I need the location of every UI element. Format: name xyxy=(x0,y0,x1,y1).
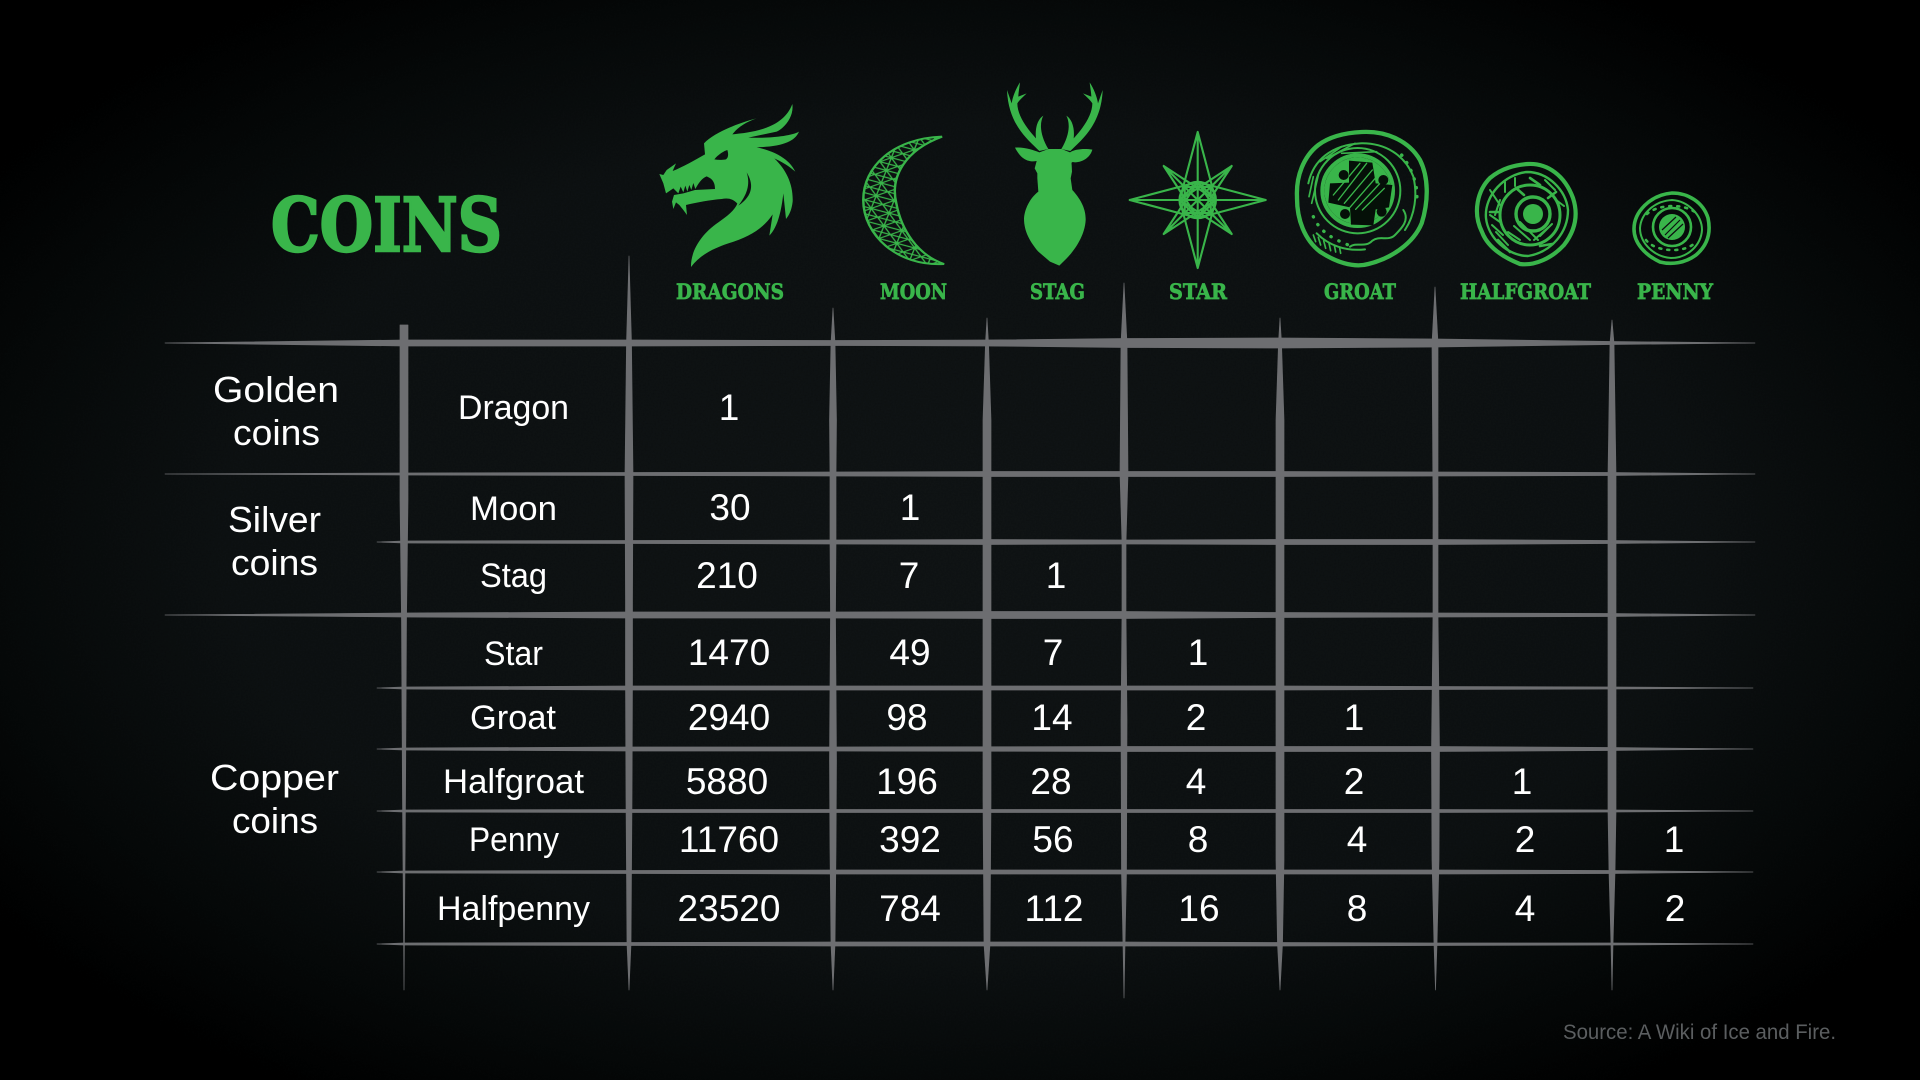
column: halfgroat values xyxy=(1512,761,1535,929)
column: dragons values: 2940 xyxy=(688,697,770,738)
column: dragons values: 1470 xyxy=(688,632,770,673)
icon: stag xyxy=(1007,82,1103,266)
column headers xyxy=(676,279,1714,304)
column: dragons values: 30 xyxy=(709,487,751,528)
column: groat values: 2 xyxy=(1344,761,1364,802)
column: dragons values: 5880 xyxy=(686,761,768,802)
group: silver coins: Silver xyxy=(228,499,321,540)
icon: star xyxy=(1130,132,1266,268)
header: star: STAR xyxy=(1169,279,1228,304)
column: star values xyxy=(1178,632,1220,929)
group: copper coins xyxy=(210,757,339,841)
column: star values: 2 xyxy=(1186,697,1206,738)
header: dragons: DRAGONS xyxy=(676,279,784,304)
column: star values: 16 xyxy=(1178,888,1220,929)
column: moon values: 7 xyxy=(899,555,919,596)
column: penny values: 2 xyxy=(1665,888,1685,929)
column: groat values xyxy=(1344,697,1367,929)
column: groat values: 4 xyxy=(1347,819,1367,860)
column: halfgroat values: 2 xyxy=(1515,819,1535,860)
group: copper coins: Copper xyxy=(210,757,339,798)
column: star values: 4 xyxy=(1186,761,1206,802)
header: penny: PENNY xyxy=(1637,279,1714,304)
group labels xyxy=(210,369,339,841)
row labels: Moon xyxy=(470,490,557,528)
row labels xyxy=(437,389,590,928)
column: moon values xyxy=(876,487,941,929)
row labels: Halfgroat xyxy=(443,763,585,801)
column: dragons values: 210 xyxy=(696,555,758,596)
table values xyxy=(678,387,1685,929)
column: stag values: 56 xyxy=(1032,819,1074,860)
icon: penny coin xyxy=(1634,193,1709,263)
column: moon values: 392 xyxy=(879,819,941,860)
column: dragons values: 1 xyxy=(719,387,739,428)
column: halfgroat values: 1 xyxy=(1512,761,1532,802)
column: moon values: 49 xyxy=(889,632,931,673)
title: COINS xyxy=(271,183,502,269)
group: silver coins xyxy=(228,499,321,583)
row labels: Star xyxy=(484,635,543,673)
column: penny values: 1 xyxy=(1664,819,1684,860)
column: stag values: 7 xyxy=(1043,632,1063,673)
column: groat values: 8 xyxy=(1347,888,1367,929)
column: halfgroat values: 4 xyxy=(1515,888,1535,929)
row labels: Groat xyxy=(470,699,557,737)
row labels: Penny xyxy=(469,821,559,859)
icon: dragon xyxy=(659,104,799,267)
column: stag values: 28 xyxy=(1030,761,1072,802)
icon: groat coin xyxy=(1297,132,1427,265)
row labels: Stag xyxy=(480,557,547,595)
column: stag values: 1 xyxy=(1046,555,1066,596)
column: dragons values: 23520 xyxy=(678,888,780,929)
column: star values: 8 xyxy=(1188,819,1208,860)
header: halfgroat: HALFGROAT xyxy=(1460,279,1591,304)
column: stag values xyxy=(1024,555,1084,929)
column: groat values: 1 xyxy=(1344,697,1364,738)
header: moon: MOON xyxy=(880,279,947,304)
column: moon values: 196 xyxy=(876,761,938,802)
header: groat: GROAT xyxy=(1324,279,1396,304)
column: moon values: 784 xyxy=(879,888,941,929)
column: moon values: 1 xyxy=(900,487,920,528)
group: golden coins: Golden xyxy=(213,369,339,410)
column: penny values xyxy=(1664,819,1685,929)
table grid lines xyxy=(165,256,1755,998)
source note: Source: A Wiki of Ice and Fire. xyxy=(1563,1021,1836,1044)
icon: moon xyxy=(860,133,946,267)
row labels: Dragon xyxy=(458,389,569,427)
column: stag values: 14 xyxy=(1031,697,1073,738)
icon: halfgroat coin xyxy=(1477,164,1576,264)
row labels: Halfpenny xyxy=(437,890,590,928)
column: dragons values xyxy=(678,387,780,929)
column: stag values: 112 xyxy=(1024,888,1084,929)
header: stag: STAG xyxy=(1030,279,1085,304)
group: golden coins xyxy=(213,369,339,453)
group: copper coins: coins xyxy=(232,800,318,841)
column: moon values: 98 xyxy=(886,697,928,738)
group: golden coins: coins xyxy=(233,412,320,453)
column: dragons values: 11760 xyxy=(679,819,779,860)
column: star values: 1 xyxy=(1188,632,1208,673)
group: silver coins: coins xyxy=(231,542,318,583)
